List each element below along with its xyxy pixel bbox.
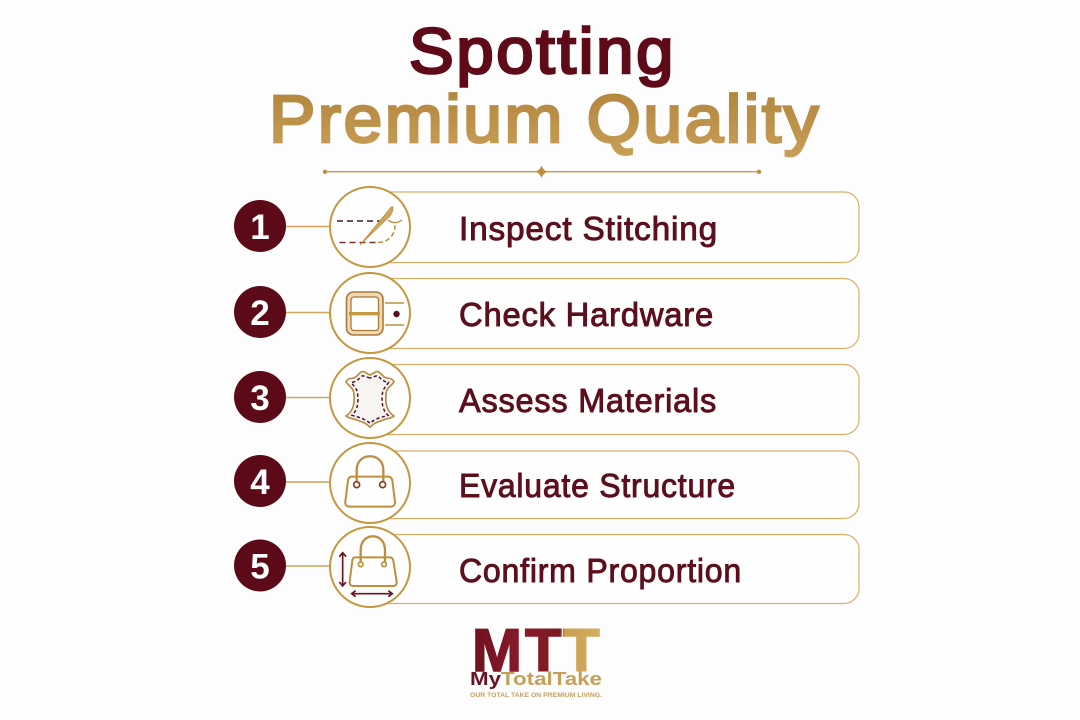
step 5 icon: handbag with size arrows [330,527,410,607]
step 4 number badge: 4 [250,463,270,502]
step 5 connector [286,565,331,567]
step 4: Evaluate Structure [234,443,859,523]
title line 1: Spotting [409,15,676,87]
step 2 number badge: 2 [250,294,270,333]
step 4 number badge [234,455,286,507]
step 1 label: Inspect Stitching [459,210,718,247]
step 3 connector [286,396,331,398]
step 5 number badge [234,540,286,592]
step 3 number badge: 3 [250,379,270,418]
step 3 label: Assess Materials [459,382,717,419]
step 1 panel [372,192,859,262]
logo monogram: MTT [472,617,600,684]
step 3 icon: leather hide [330,358,410,438]
step 2 connector [286,312,331,314]
step 2 icon: belt buckle [330,273,410,353]
step 1: Inspect Stitching [234,187,859,267]
step 4 connector [286,481,331,483]
step 1 number badge: 1 [250,208,270,247]
step 5 panel [372,534,859,604]
title [269,15,821,157]
step 3 number badge [234,371,286,423]
step 1 icon: needle and stitching [330,187,410,267]
step 2 label: Check Hardware [459,296,714,333]
logo tagline: OUR TOTAL TAKE ON PREMIUM LIVING. [470,692,602,699]
step 5: Confirm Proportion [234,527,859,607]
logo wordmark: My TotalTake [470,669,602,689]
step 4 panel [372,451,859,518]
step 3 panel [372,364,859,434]
logo [470,617,602,699]
step 4 label: Evaluate Structure [459,467,736,504]
step 5 label: Confirm Proportion [459,552,742,589]
step 3: Assess Materials [234,358,859,438]
step 4 icon: handbag [330,443,410,523]
step 1 connector [286,226,331,228]
step 2 number badge [234,286,286,338]
step 2: Check Hardware [234,273,859,353]
step 5 number badge: 5 [250,548,270,586]
step 1 number badge [234,200,286,252]
step 2 panel [372,278,859,348]
title line 2: Premium Quality [269,82,821,157]
title divider [323,166,761,178]
